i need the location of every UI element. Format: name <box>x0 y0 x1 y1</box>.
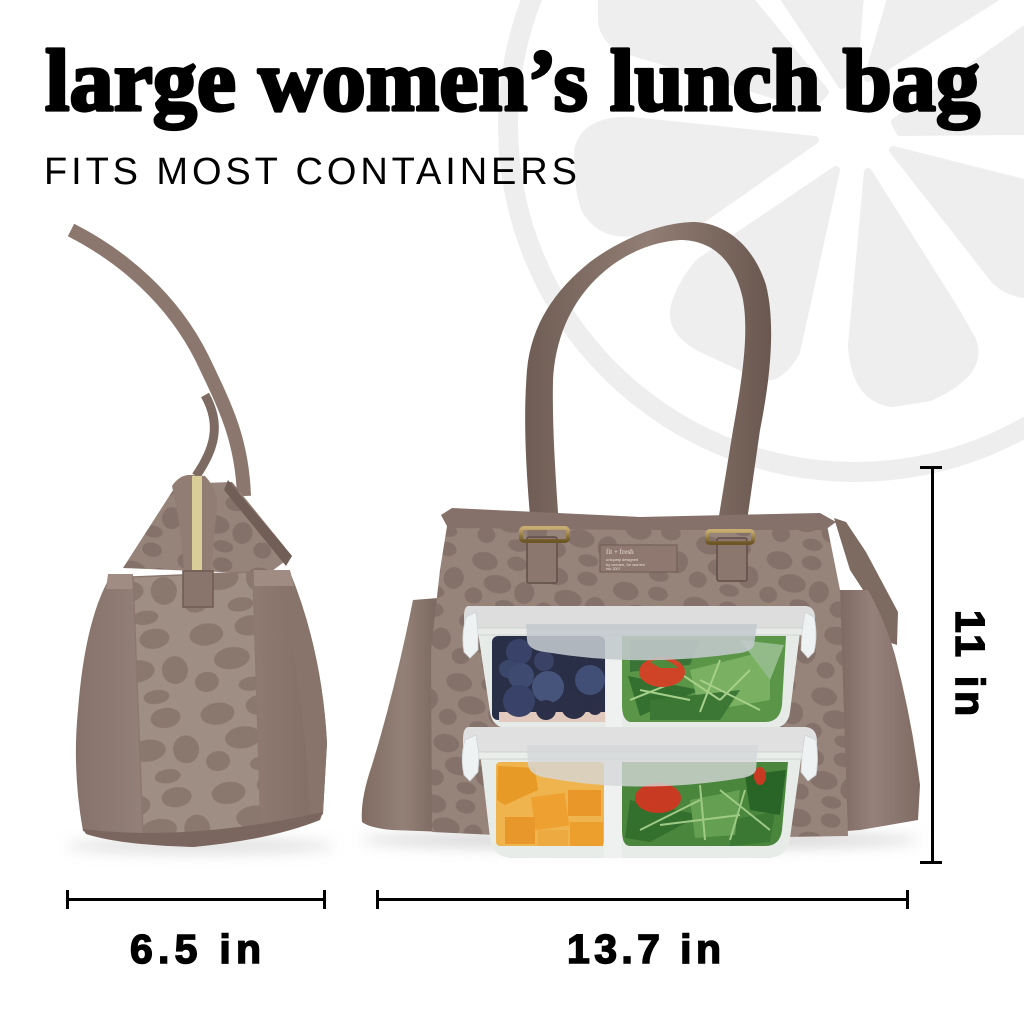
brand label: fit + fresh <box>606 548 634 556</box>
rear edge <box>224 480 292 566</box>
glass body <box>480 752 802 858</box>
glass body <box>478 632 800 729</box>
zipper gusset <box>172 475 217 573</box>
label 6.5 in: 6.5 in <box>130 926 261 972</box>
left side pocket <box>362 598 446 832</box>
divider <box>606 634 622 730</box>
front view bag <box>360 222 920 849</box>
right end strap <box>834 518 898 645</box>
zipper <box>192 476 202 570</box>
main body <box>431 520 848 840</box>
left buckle <box>521 528 568 541</box>
bottom glass container <box>462 727 818 858</box>
brand label: by women, for women <box>606 562 645 567</box>
cheese compartment <box>496 762 604 846</box>
top binding <box>441 508 836 530</box>
bottom trim <box>83 812 323 847</box>
blueberries compartment <box>492 636 605 722</box>
right side pocket <box>834 590 920 832</box>
center panel <box>133 572 261 836</box>
divider <box>604 760 622 858</box>
top glass container <box>463 606 816 730</box>
lid rim <box>470 628 807 635</box>
tomato <box>635 783 681 813</box>
ground shadow <box>360 831 920 849</box>
clip left <box>463 612 478 658</box>
leather tab <box>183 571 213 607</box>
handles <box>525 222 771 528</box>
salad compartment <box>622 762 788 846</box>
front lock tab <box>527 745 758 786</box>
brand label: est. 2007 <box>606 567 620 571</box>
width dimension: front <box>376 890 909 972</box>
width dimension: side <box>66 890 326 972</box>
brand label: uniquely designed <box>606 557 638 562</box>
lid <box>463 727 817 753</box>
brand label <box>600 545 677 572</box>
strap back strand <box>196 395 214 476</box>
strap <box>71 230 244 496</box>
front lock tab <box>526 624 757 660</box>
tomato slice 2 <box>754 767 766 785</box>
label 11 in: 11 in <box>947 610 993 716</box>
label 13.7 in: 13.7 in <box>567 926 721 972</box>
tomato <box>639 657 685 687</box>
main body <box>76 572 327 847</box>
left handle tab <box>527 537 557 583</box>
side view bag <box>65 230 335 853</box>
clip left <box>462 735 479 781</box>
upper flap <box>123 482 292 574</box>
rear pattern strip <box>278 576 327 818</box>
lid <box>464 606 815 630</box>
lid rim <box>472 752 808 759</box>
clip right <box>801 735 818 781</box>
salad compartment <box>622 636 786 722</box>
clip right <box>801 612 816 658</box>
background lemon slice <box>498 0 1024 482</box>
lemon segments <box>578 0 1024 403</box>
right handle tab <box>717 538 747 581</box>
lemon rind ring <box>498 0 1024 482</box>
right buckle <box>707 531 753 543</box>
subtitle: FITS MOST CONTAINERS <box>44 151 577 193</box>
ground shadow <box>65 839 335 853</box>
rim bands <box>106 570 294 589</box>
height dimension <box>920 466 993 864</box>
title: large women’s lunch bag <box>45 33 980 130</box>
